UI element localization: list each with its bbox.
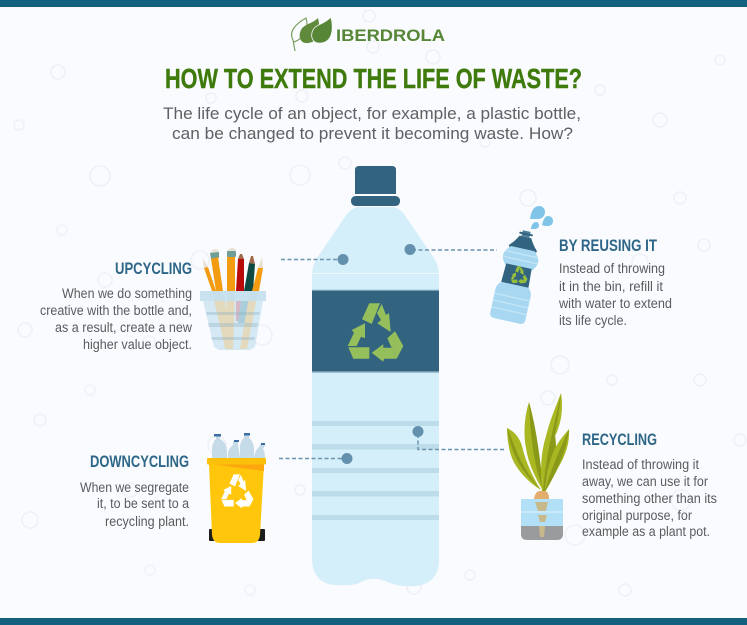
heading and text: downcycling: recycling plant.	[105, 514, 189, 529]
title: HOW TO EXTEND THE LIFE OF WASTE?	[165, 63, 582, 94]
roots	[534, 491, 549, 499]
heading and text: by reusing it: with water to extend	[558, 296, 672, 311]
heading and text: upcycling: UPCYCLING	[115, 259, 192, 278]
recycling symbol	[348, 303, 403, 362]
subtitle	[163, 104, 581, 143]
bottle body	[312, 207, 439, 586]
logo: Iberdrola: IBERDROLA	[336, 27, 445, 45]
bottle label	[312, 290, 439, 372]
heading and text: upcycling: as a result, create a new	[55, 320, 192, 335]
heading and text: by reusing it: its life cycle.	[559, 313, 627, 328]
recycling symbol	[511, 266, 527, 284]
logo: Iberdrola	[292, 17, 445, 51]
heading and text: by reusing it: BY REUSING IT	[559, 236, 657, 255]
pot	[521, 499, 563, 527]
heading and text: upcycling	[40, 259, 192, 352]
connector: recycling	[412, 426, 505, 450]
subtitle: can be changed to prevent it becoming waste. How?	[172, 124, 573, 143]
connector: upcycling	[281, 254, 348, 265]
connector: downcycling	[279, 453, 352, 464]
icon: plant in cut bottle pot	[507, 393, 569, 540]
heading and text: downcycling: When we segregate	[80, 480, 189, 495]
heading and text: by reusing it	[558, 236, 672, 328]
wheels	[209, 529, 217, 541]
heading and text: upcycling: higher value object.	[83, 337, 192, 352]
bottom bar	[0, 618, 747, 625]
subtitle: The life cycle of an object, for example, a plastic bottle,	[163, 104, 581, 123]
cup	[203, 301, 263, 350]
heading and text: recycling	[582, 430, 717, 539]
heading and text: recycling: RECYCLING	[582, 430, 657, 449]
bottle cap	[355, 166, 396, 194]
pencils	[203, 258, 208, 269]
leaves	[548, 430, 556, 470]
heading and text: recycling: original purpose, for	[582, 508, 692, 523]
bottle ribs	[312, 421, 439, 520]
heading and text: downcycling: it, to be sent to a	[97, 496, 189, 511]
heading and text: recycling: something other than its	[582, 491, 717, 506]
bin body	[209, 464, 264, 543]
heading and text: downcycling	[80, 452, 189, 529]
heading and text: by reusing it: it in the bin, refill it	[559, 279, 663, 294]
heading and text: upcycling: When we do something	[62, 286, 192, 301]
water drops	[530, 206, 545, 219]
heading and text: recycling: example as a plant pot.	[582, 524, 710, 539]
icon: pencil cup	[200, 248, 266, 350]
central plastic bottle	[312, 166, 439, 586]
heading and text: by reusing it: Instead of throwing	[559, 261, 665, 276]
icon: recycling bin with bottles	[207, 433, 266, 543]
top bar	[0, 0, 747, 7]
connector: by reusing it	[404, 244, 497, 255]
heading and text: recycling: Instead of throwing it	[582, 457, 699, 472]
heading and text: downcycling: DOWNCYCLING	[90, 452, 189, 471]
recycling symbol	[221, 474, 253, 508]
icon: reusable sports bottle	[489, 206, 553, 325]
bottles in bin	[212, 433, 265, 458]
heading and text: upcycling: creative with the bottle and,	[40, 303, 192, 318]
heading and text: recycling: away, we can use it for	[582, 474, 708, 489]
